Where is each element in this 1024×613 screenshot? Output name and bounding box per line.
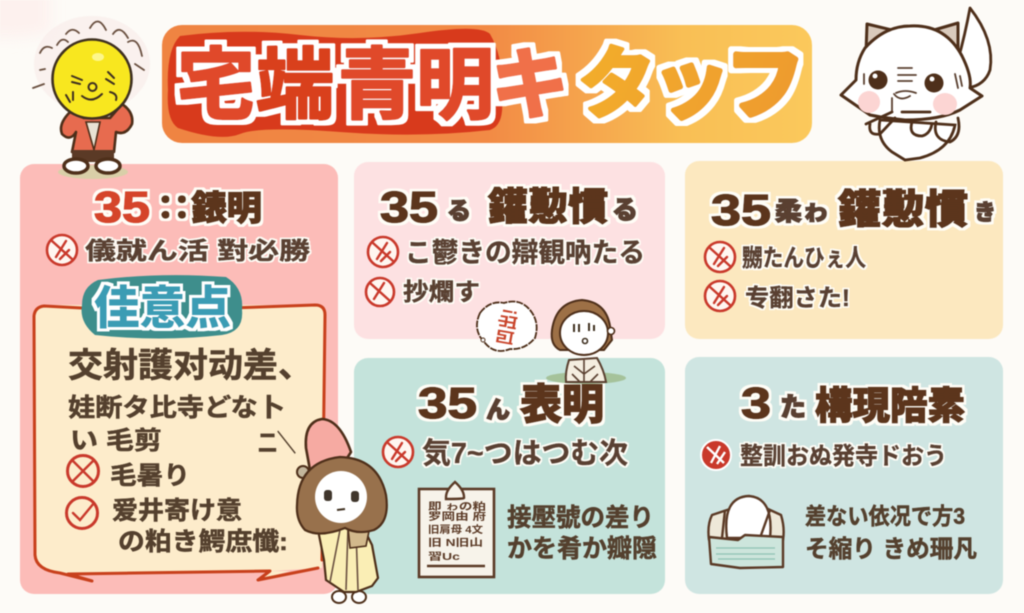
heading: た: [780, 392, 806, 422]
heading: 鑵懃慣: [838, 188, 968, 232]
note text: 爱井寄け意: [112, 497, 242, 525]
icon: clipboard: 旧肩母 4文: [428, 523, 483, 536]
heading: [418, 379, 604, 428]
cheeks: [858, 91, 880, 113]
heading: る: [612, 195, 638, 225]
description: 接壓號の差り: [507, 504, 654, 532]
bullet one: こ鬱きの辯観吶たる: [405, 238, 645, 268]
panel: bottom right blue: [685, 357, 1003, 594]
description: そ縮り きめ珊凡: [805, 536, 977, 563]
icon: check: [66, 498, 98, 528]
panel: top left pink: [20, 164, 338, 594]
heading: [94, 183, 262, 232]
heading: る: [447, 198, 471, 225]
bullet: 儀就ん活 對必勝: [85, 238, 310, 265]
body: [879, 120, 955, 160]
icon: clipboard: 習Uc: [428, 551, 461, 563]
heading: 3: [741, 379, 771, 428]
heading: 35: [711, 186, 771, 235]
icon: clipboard: [419, 482, 494, 577]
title banner: [162, 25, 812, 143]
heading: 35: [380, 183, 438, 232]
rays: [33, 21, 144, 88]
thought bubble: [477, 302, 537, 351]
face: [560, 311, 608, 355]
title text: キ: [491, 41, 569, 129]
heading: [741, 379, 965, 428]
legs: [332, 591, 346, 603]
character: thinking girl: [477, 300, 626, 384]
icon: prohibition: [368, 237, 398, 267]
icon: prohibition: [383, 437, 413, 467]
title text: ッ: [652, 40, 730, 128]
bullet: 整訓おぬ発寺ドおう: [740, 443, 947, 470]
heading: 鑵懃慣: [488, 187, 608, 229]
legs: [72, 150, 114, 162]
note text: [68, 347, 313, 556]
badge: key points: 佳意点: [94, 282, 231, 334]
panel: bottom middle mint: [354, 358, 665, 594]
ground shadow: [546, 372, 626, 384]
bullet two: 专翻さた!: [745, 285, 850, 312]
face: [66, 72, 116, 102]
tail: [958, 8, 991, 88]
icon: basket: [708, 496, 784, 568]
thought bubble: 凹出!: [493, 307, 522, 347]
title text: フ: [726, 40, 804, 128]
description: かを肴か瓣隠: [507, 535, 657, 563]
heading: ∷錶明: [156, 190, 262, 228]
eyes: [868, 70, 888, 90]
title text: 青: [338, 41, 416, 129]
hair: [297, 457, 387, 534]
panel: top middle pink: [354, 162, 665, 339]
robe: [318, 525, 378, 592]
heading: き: [974, 200, 996, 225]
heading: 柔ゎ: [775, 198, 829, 226]
icon: prohibition: [366, 278, 394, 306]
note text: 毛暑り: [110, 462, 190, 490]
halo: [34, 16, 150, 112]
background tint: [0, 0, 50, 37]
bullet two: [366, 278, 480, 306]
bullet one: [705, 242, 866, 272]
icon: prohibition: [701, 440, 731, 470]
title text: 宅: [177, 41, 255, 129]
bullet: 気7~つはつむ次: [422, 437, 628, 470]
heading: [380, 183, 638, 232]
head: [841, 26, 982, 120]
icon: prohibition: [705, 281, 735, 311]
note text: 二＼: [258, 430, 296, 457]
torso: [566, 358, 606, 382]
character: girl with pink hat: [297, 419, 387, 603]
description: [507, 504, 657, 563]
note text: 娃断タ比寺どな卜: [68, 394, 285, 422]
icon: cross: [68, 456, 98, 486]
face marks: [864, 68, 962, 112]
bullet: [47, 235, 310, 265]
title text: 明: [416, 41, 494, 129]
note text: の粕き鰐庶懺:: [118, 528, 288, 556]
ears: [866, 23, 958, 52]
shadow: [58, 165, 128, 179]
icon: clipboard: 旧 N旧山: [428, 537, 483, 549]
note text: い 毛剪: [70, 427, 162, 455]
head: [52, 40, 132, 118]
panel: top right yellow: [685, 161, 1003, 339]
note text: 交射護对动差、: [68, 347, 313, 385]
icon: prohibition: [705, 242, 735, 272]
title text: タ: [578, 40, 656, 128]
hair: [552, 300, 612, 350]
description: 差ない依况で方3: [805, 503, 965, 529]
callout box: note: [34, 305, 325, 581]
bullet one: 嬲たんひぇ人: [742, 245, 866, 272]
icon: clipboard: 即 ゎの粕: [428, 500, 486, 513]
paws: [866, 112, 959, 142]
bullet two: 抄爛す: [403, 279, 480, 306]
heading: [711, 186, 996, 235]
face: [315, 471, 367, 523]
character: white cat: [841, 8, 991, 160]
description: [805, 503, 977, 563]
heading: 構現陪素: [815, 386, 965, 428]
arms and body: [61, 104, 132, 152]
hat: [306, 419, 351, 470]
icon: prohibition: [47, 235, 77, 265]
character: lightbulb person: [33, 16, 150, 179]
bullet two: [705, 281, 850, 312]
heading: ん: [486, 397, 510, 424]
icon: clipboard: 罗岡由 府: [428, 510, 486, 523]
heading: 35: [418, 379, 477, 428]
heading: 35: [94, 183, 150, 232]
shoes: [64, 159, 88, 173]
heading: 表明: [520, 381, 604, 428]
title red backing: [168, 29, 502, 137]
title text: [177, 40, 804, 129]
title text: 端: [256, 41, 334, 129]
